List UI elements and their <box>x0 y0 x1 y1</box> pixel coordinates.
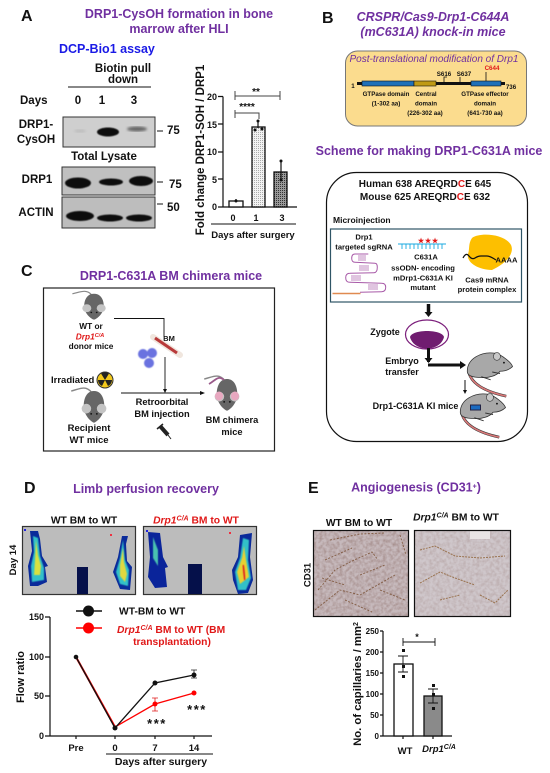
legend: transplantation) <box>133 637 211 648</box>
panel: scheme box: Embryo <box>385 356 419 366</box>
western blot: DRP1 <box>62 167 155 195</box>
microinjection box: AAAA <box>496 256 518 264</box>
panel: post-translational modification: S616 <box>437 71 452 78</box>
panel: chimera scheme: WT or <box>79 321 104 331</box>
western blot labels: 1 <box>99 95 106 107</box>
bar chart: fold change: 3 <box>279 213 285 223</box>
panel: chimera scheme <box>44 288 274 451</box>
title: panel B: CRSPR/Cas9-Drp1-C644A <box>357 10 509 24</box>
image labels E: Drp1 <box>413 512 449 524</box>
icon: bone <box>153 337 180 355</box>
panel: scheme box <box>326 172 528 442</box>
histology Drp1 C/A <box>414 530 510 616</box>
image labels: WT BM to WT <box>51 516 118 526</box>
western blot labels <box>17 63 182 219</box>
microinjection box: ★ <box>432 237 439 245</box>
line chart: flow ratio: Flow ratio <box>15 651 27 703</box>
panel: post-translational modification <box>346 51 526 126</box>
panel: chimera scheme: donor mice <box>69 341 114 351</box>
title: panel C: DRP1-C631A BM chimera mice <box>80 269 262 283</box>
bar chart: capillaries: WT <box>398 746 413 757</box>
image labels E <box>326 512 500 529</box>
title: panel A: marrow after HLI <box>129 22 229 36</box>
bar chart: fold change: Fold change DRP1-SOH / DRP1 <box>195 64 207 235</box>
microinjection box: mutant <box>410 283 436 292</box>
microinjection box: Drp1 <box>355 232 373 242</box>
title: panel E: ) <box>477 480 481 494</box>
panel: chimera scheme: WT mice <box>69 435 109 446</box>
line chart: flow ratio: 100 <box>29 652 44 662</box>
panel: post-translational modification: C644 <box>485 65 500 72</box>
microinjection box: Cas9 mRNA <box>465 276 509 284</box>
text: CD31 <box>302 562 314 587</box>
bar chart: fold change: 20 <box>207 92 217 102</box>
arrow: down small <box>464 380 466 392</box>
image labels: BM to WT <box>189 516 240 526</box>
image labels: Drp1 <box>153 516 189 526</box>
western blot: ACTIN <box>62 197 155 228</box>
icon: radiation <box>97 372 113 388</box>
panel: post-translational modification: Central <box>415 91 437 98</box>
bar chart: fold change: 10 <box>207 147 217 157</box>
title: panel E: Angiogenesis (CD31 <box>351 480 473 494</box>
bar chart: capillaries: 50 <box>370 711 380 720</box>
panel: post-translational modification: S637 <box>457 71 472 78</box>
line chart: flow ratio: 14 <box>189 743 200 754</box>
laser doppler image WT <box>22 526 136 594</box>
line chart: flow ratio: Pre <box>68 743 84 754</box>
western blot labels: 3 <box>131 95 137 107</box>
laser doppler image Drp1 C/A <box>144 526 256 594</box>
panel: scheme box: Mouse 625 AREQRDCE 632 <box>360 192 491 203</box>
panel label B: B <box>322 10 334 27</box>
line chart: flow ratio: *** <box>187 702 207 717</box>
bar chart: fold change: 5 <box>212 175 217 185</box>
bar chart: capillaries: 250 <box>366 627 380 636</box>
panel: post-translational modification: (641-730 aa) <box>467 110 503 117</box>
panel: chimera scheme: Recipient <box>68 423 111 434</box>
zygote: Zygote <box>370 327 400 337</box>
panel: scheme box: Microinjection <box>333 215 391 225</box>
western blot: DRP1-CysOH <box>63 117 155 147</box>
panel: post-translational modification: domain <box>474 100 496 108</box>
bar chart: capillaries: 2 <box>353 622 360 626</box>
western blot labels: 75 <box>167 125 180 137</box>
western blot labels: Days <box>20 95 48 107</box>
legend: WT-BM to WT <box>119 606 186 618</box>
panel: chimera scheme: mice <box>221 427 243 437</box>
bar chart: fold change: 15 <box>207 120 217 130</box>
line chart: flow ratio: 7 <box>152 743 158 754</box>
image labels E: WT BM to WT <box>326 518 393 529</box>
bar chart: capillaries <box>352 622 456 757</box>
arrow: embryo transfer <box>428 348 461 365</box>
heading: DCP-Bio1 assay: DCP-Bio1 assay <box>59 42 155 56</box>
western blot labels: DRP1 <box>22 174 53 186</box>
panel: chimera scheme: Drp1 <box>76 332 95 342</box>
icon: syringe <box>157 424 171 439</box>
microinjection box: mDrp1-C631A KI <box>393 274 453 282</box>
title: panel B: (mC631A) knock-in mice <box>360 25 506 39</box>
western blot labels: Total Lysate <box>71 151 137 163</box>
panel: post-translational modification: domain <box>415 100 437 108</box>
line chart: flow ratio: 50 <box>34 691 44 701</box>
line chart: flow ratio <box>15 612 213 768</box>
microinjection box: C631A <box>414 252 438 262</box>
microinjection box: ★ <box>418 237 425 245</box>
microinjection box: ★ <box>425 237 432 245</box>
panel label C: C <box>21 263 33 280</box>
bar chart: fold change: ** <box>252 87 260 98</box>
western blot labels: ACTIN <box>18 207 54 219</box>
title: panel A: DRP1-CysOH formation in bone <box>85 7 273 21</box>
western blot labels: 0 <box>75 95 81 107</box>
arrow: down <box>427 304 430 313</box>
heading: scheme: Scheme for making DRP1-C631A mice <box>316 144 542 158</box>
microinjection box: ssODN- encoding <box>391 264 455 272</box>
icon: KI mouse <box>460 394 506 437</box>
line chart: flow ratio: 150 <box>29 612 44 622</box>
panel: post-translational modification: GTPase effector <box>461 91 509 98</box>
panel: chimera scheme: Retroorbital <box>136 397 188 407</box>
image labels E: C/A <box>437 512 449 520</box>
bar chart: fold change: 0 <box>212 202 217 212</box>
panel: post-translational modification: (226-302 aa) <box>407 110 443 117</box>
title: panel D: Limb perfusion recovery <box>73 482 219 496</box>
panel: post-translational modification: GTPase domain <box>363 91 410 98</box>
legend: C/A <box>140 625 153 632</box>
bar chart: fold change: Days after surgery <box>211 230 295 241</box>
panel: post-translational modification: (1-302 aa) <box>372 100 400 108</box>
panel: chimera scheme: BM injection <box>134 409 190 419</box>
bar chart: capillaries: No. of capillaries / mm <box>352 626 364 746</box>
legend: Drp1 <box>117 625 153 636</box>
legend <box>76 606 225 648</box>
image labels: C/A <box>177 516 189 522</box>
line chart: flow ratio: 0 <box>39 731 44 741</box>
bar chart: capillaries: 200 <box>366 648 380 657</box>
western blot labels: 75 <box>169 179 182 191</box>
bar chart: capillaries: 100 <box>366 690 380 699</box>
bar chart: capillaries: 150 <box>366 669 380 678</box>
panel: scheme box: Human 638 AREQRDCE 645 <box>359 179 492 190</box>
bar chart: capillaries: 0 <box>375 732 380 741</box>
panel: post-translational modification: Post-translational modification of Drp1 <box>350 54 518 65</box>
bar chart: capillaries: * <box>415 632 419 642</box>
text: Day 14 <box>8 544 19 575</box>
icon: mouse <box>467 353 513 396</box>
panel label D: D <box>24 480 36 497</box>
panel: post-translational modification: 1 <box>351 83 355 90</box>
title: panel E: + <box>473 484 477 490</box>
panel: chimera scheme: BM <box>163 334 175 343</box>
microinjection box <box>330 229 522 302</box>
western blot labels: DRP1- <box>19 119 53 131</box>
panel label A: A <box>21 8 33 25</box>
western blot labels: CysOH <box>17 134 55 146</box>
bar chart: fold change: 1 <box>253 213 259 223</box>
panel: chimera scheme: Irradiated <box>51 375 94 386</box>
icon: cells <box>138 348 157 368</box>
line chart: flow ratio: 0 <box>112 743 118 754</box>
bar chart: fold change: **** <box>239 102 255 113</box>
microinjection box: protein complex <box>458 285 517 294</box>
western blot labels: Biotin pull <box>95 63 151 75</box>
panel: scheme box: Drp1-C631A KI mice <box>373 401 458 411</box>
legend: BM to WT (BM <box>153 625 225 636</box>
panel: scheme box: transfer <box>385 367 419 377</box>
panel: chimera scheme: C/A <box>95 333 104 339</box>
icon: chimera mouse <box>204 376 239 411</box>
image labels <box>51 516 240 526</box>
line chart: flow ratio: *** <box>147 716 167 731</box>
bar chart: capillaries: C/A <box>444 744 456 751</box>
bar chart: fold change: 0 <box>230 213 236 223</box>
western blot labels: down <box>108 74 138 86</box>
bar chart: capillaries: Drp1 <box>422 744 444 755</box>
panel: chimera scheme: BM chimera <box>206 415 259 425</box>
zygote <box>370 320 448 349</box>
histology WT <box>314 530 408 616</box>
line chart: flow ratio: Days after surgery <box>115 756 207 768</box>
panel: post-translational modification: 736 <box>506 84 517 91</box>
bar chart: fold change <box>195 64 297 241</box>
microinjection box: targeted sgRNA <box>335 242 393 252</box>
image labels E: BM to WT <box>449 512 500 524</box>
western blot labels: 50 <box>167 202 180 214</box>
panel label E: E <box>308 480 319 497</box>
